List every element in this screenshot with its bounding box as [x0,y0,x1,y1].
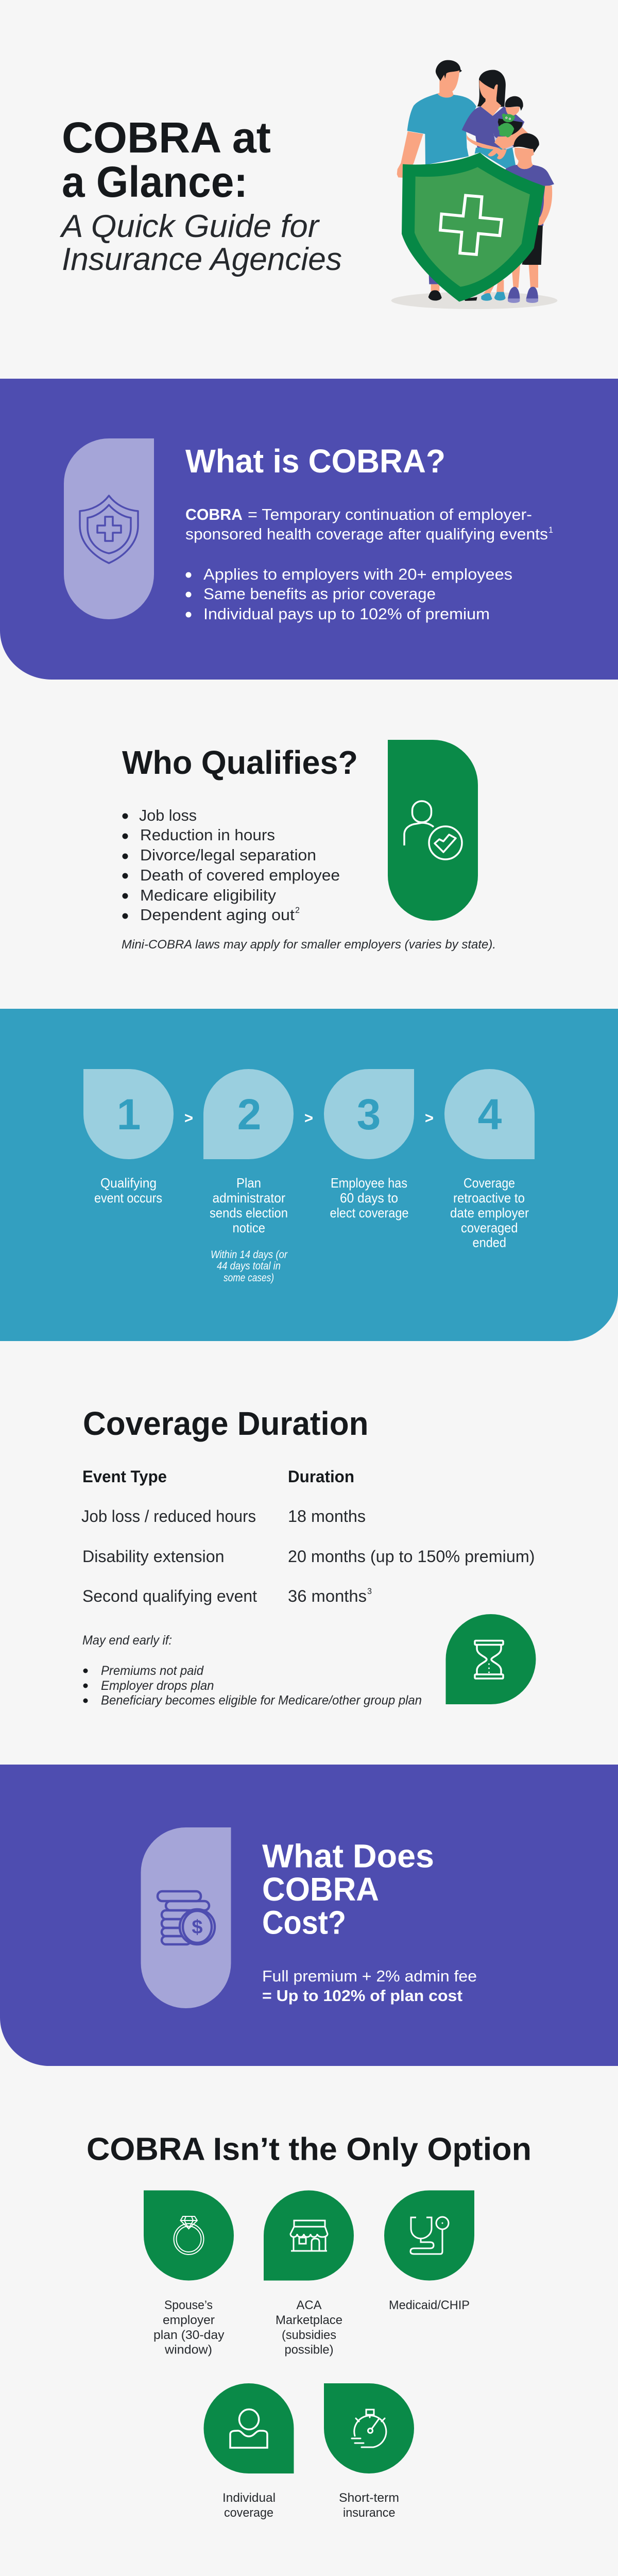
step 4: date employer [450,1205,529,1221]
heading: Coverage Duration [83,1405,369,1442]
subtitle [59,209,342,277]
option: ACA marketplace: (subsidies [282,2328,336,2342]
icon: stack of coins: $ [192,1917,203,1938]
option: spouse's employer plan: plan (30-day [153,2328,225,2342]
step 4: ended [473,1234,506,1250]
option: spouse's employer plan: Spouse’s [164,2298,213,2312]
duration table: Disability extension [82,1547,225,1566]
icon: hourglass [446,1614,536,1704]
bullet list [185,565,512,623]
arrow: > [184,1110,193,1127]
duration table: Duration [288,1467,354,1486]
definition text: 1 [548,525,553,535]
step 2: notice [233,1220,265,1235]
option: ACA marketplace: possible) [284,2343,334,2357]
heading: What Does [262,1837,434,1874]
bullet list: Same benefits as prior coverage [203,585,436,603]
step 3: Employee has [331,1175,407,1191]
qualifying events list: Dependent aging out [140,906,295,924]
option: ACA marketplace: ACA [297,2298,321,2312]
option: ACA marketplace [264,2191,354,2357]
heading: Who Qualifies? [122,744,358,781]
option: Medicaid/CHIP [384,2191,474,2312]
option: spouse's employer plan [144,2191,234,2357]
bullet list: Applies to employers with 20+ employees [203,565,512,583]
definition text: sponsored health coverage after qualifying events [185,525,548,543]
cost formula: = Up to 102% of plan cost [262,1987,462,2005]
step 1: event occurs [94,1190,162,1206]
step 3 [324,1069,414,1221]
step 2: sends election [210,1205,288,1221]
step 1: 1 [117,1090,141,1139]
step 1: Qualifying [100,1175,157,1191]
early-end conditions [82,1633,422,1707]
note: mini-COBRA: Mini-COBRA laws may apply for smaller employers (varies by state). [122,938,496,952]
title: a Glance: [62,158,248,206]
subtitle: Insurance Agencies [62,242,342,277]
qualifying events list: Reduction in hours [140,826,275,844]
definition text: = Temporary continuation of employer- [248,505,532,523]
option: Medicaid/CHIP: Medicaid/CHIP [389,2298,470,2312]
illustration: family holding a health shield [391,60,557,309]
option: short-term insurance: Short-term [339,2491,399,2505]
step 1 [83,1069,174,1206]
definition text [185,505,553,543]
icon: person with check [388,740,478,921]
step 2: 44 days total in [217,1260,281,1272]
heading: COBRA Isn’t the Only Option [87,2132,531,2167]
duration table: Second qualifying event [82,1587,257,1605]
duration table: Job loss / reduced hours [81,1507,256,1526]
heading: COBRA [262,1871,379,1908]
option: individual coverage: coverage [224,2506,273,2520]
qualifying events list [123,806,340,924]
step 2: some cases) [224,1272,274,1284]
early-end conditions: Employer drops plan [101,1679,214,1693]
panel: other options [87,2132,531,2520]
qualifying events list: 2 [295,905,300,915]
early-end conditions: Premiums not paid [101,1664,204,1678]
step 2: administrator [212,1190,285,1206]
definition text: COBRA [185,505,243,523]
step 4 [444,1069,535,1250]
step 3: 60 days to [340,1190,398,1206]
early-end conditions: Beneficiary becomes eligible for Medicare/other group plan [101,1693,422,1707]
step 2: 2 [237,1090,261,1139]
step 4: coveraged [461,1220,518,1235]
step 3: 3 [357,1090,381,1139]
qualifying events list: Job loss [139,806,197,824]
heading [262,1837,434,1941]
option: ACA marketplace: Marketplace [276,2313,342,2327]
cost formula [262,1967,477,2005]
option: short-term insurance [324,2383,414,2520]
panel: coverage duration [81,1405,536,1707]
heading: Cost? [262,1904,346,1941]
icon: stack of coins [141,1827,231,2008]
panel: what is COBRA [0,379,618,680]
qualifying events list: Medicare eligibility [140,886,277,904]
duration table: 20 months (up to 150% premium) [288,1547,535,1566]
qualifying events list: Divorce/legal separation [140,846,316,864]
step 4: 4 [478,1090,502,1139]
subtitle: A Quick Guide for [59,209,320,244]
cost formula: Full premium + 2% admin fee [262,1967,477,1985]
arrow: > [304,1110,313,1127]
step 4: retroactive to [453,1190,525,1206]
option: spouse's employer plan: employer [163,2313,215,2327]
panel: hero header [59,60,557,309]
panel: COBRA process timeline [0,1009,618,1341]
panel: who qualifies [122,740,496,952]
early-end conditions: May end early if: [82,1633,172,1648]
qualifying events list: Death of covered employee [140,866,340,884]
option: spouse's employer plan: window) [164,2343,212,2357]
step 2 [203,1069,294,1284]
option: short-term insurance: insurance [343,2506,396,2520]
option: individual coverage: Individual [222,2491,276,2505]
duration table: 3 [367,1586,372,1596]
option: individual coverage [204,2383,294,2520]
bullet list: Individual pays up to 102% of premium [203,605,490,623]
arrow: > [425,1110,434,1127]
duration table: 36 months [288,1587,367,1605]
panel: what does COBRA cost [0,1765,618,2066]
heading: What is COBRA? [185,443,445,480]
duration table [81,1467,535,1605]
title: COBRA at [62,113,271,162]
duration table: 18 months [288,1507,366,1526]
step 2: Plan [236,1175,261,1191]
step 4: Coverage [464,1175,515,1191]
icon: shield badge [64,438,154,619]
title [62,113,271,206]
step 2: Within 14 days (or [211,1249,288,1261]
step 3: elect coverage [330,1205,409,1221]
duration table: Event Type [82,1467,167,1486]
